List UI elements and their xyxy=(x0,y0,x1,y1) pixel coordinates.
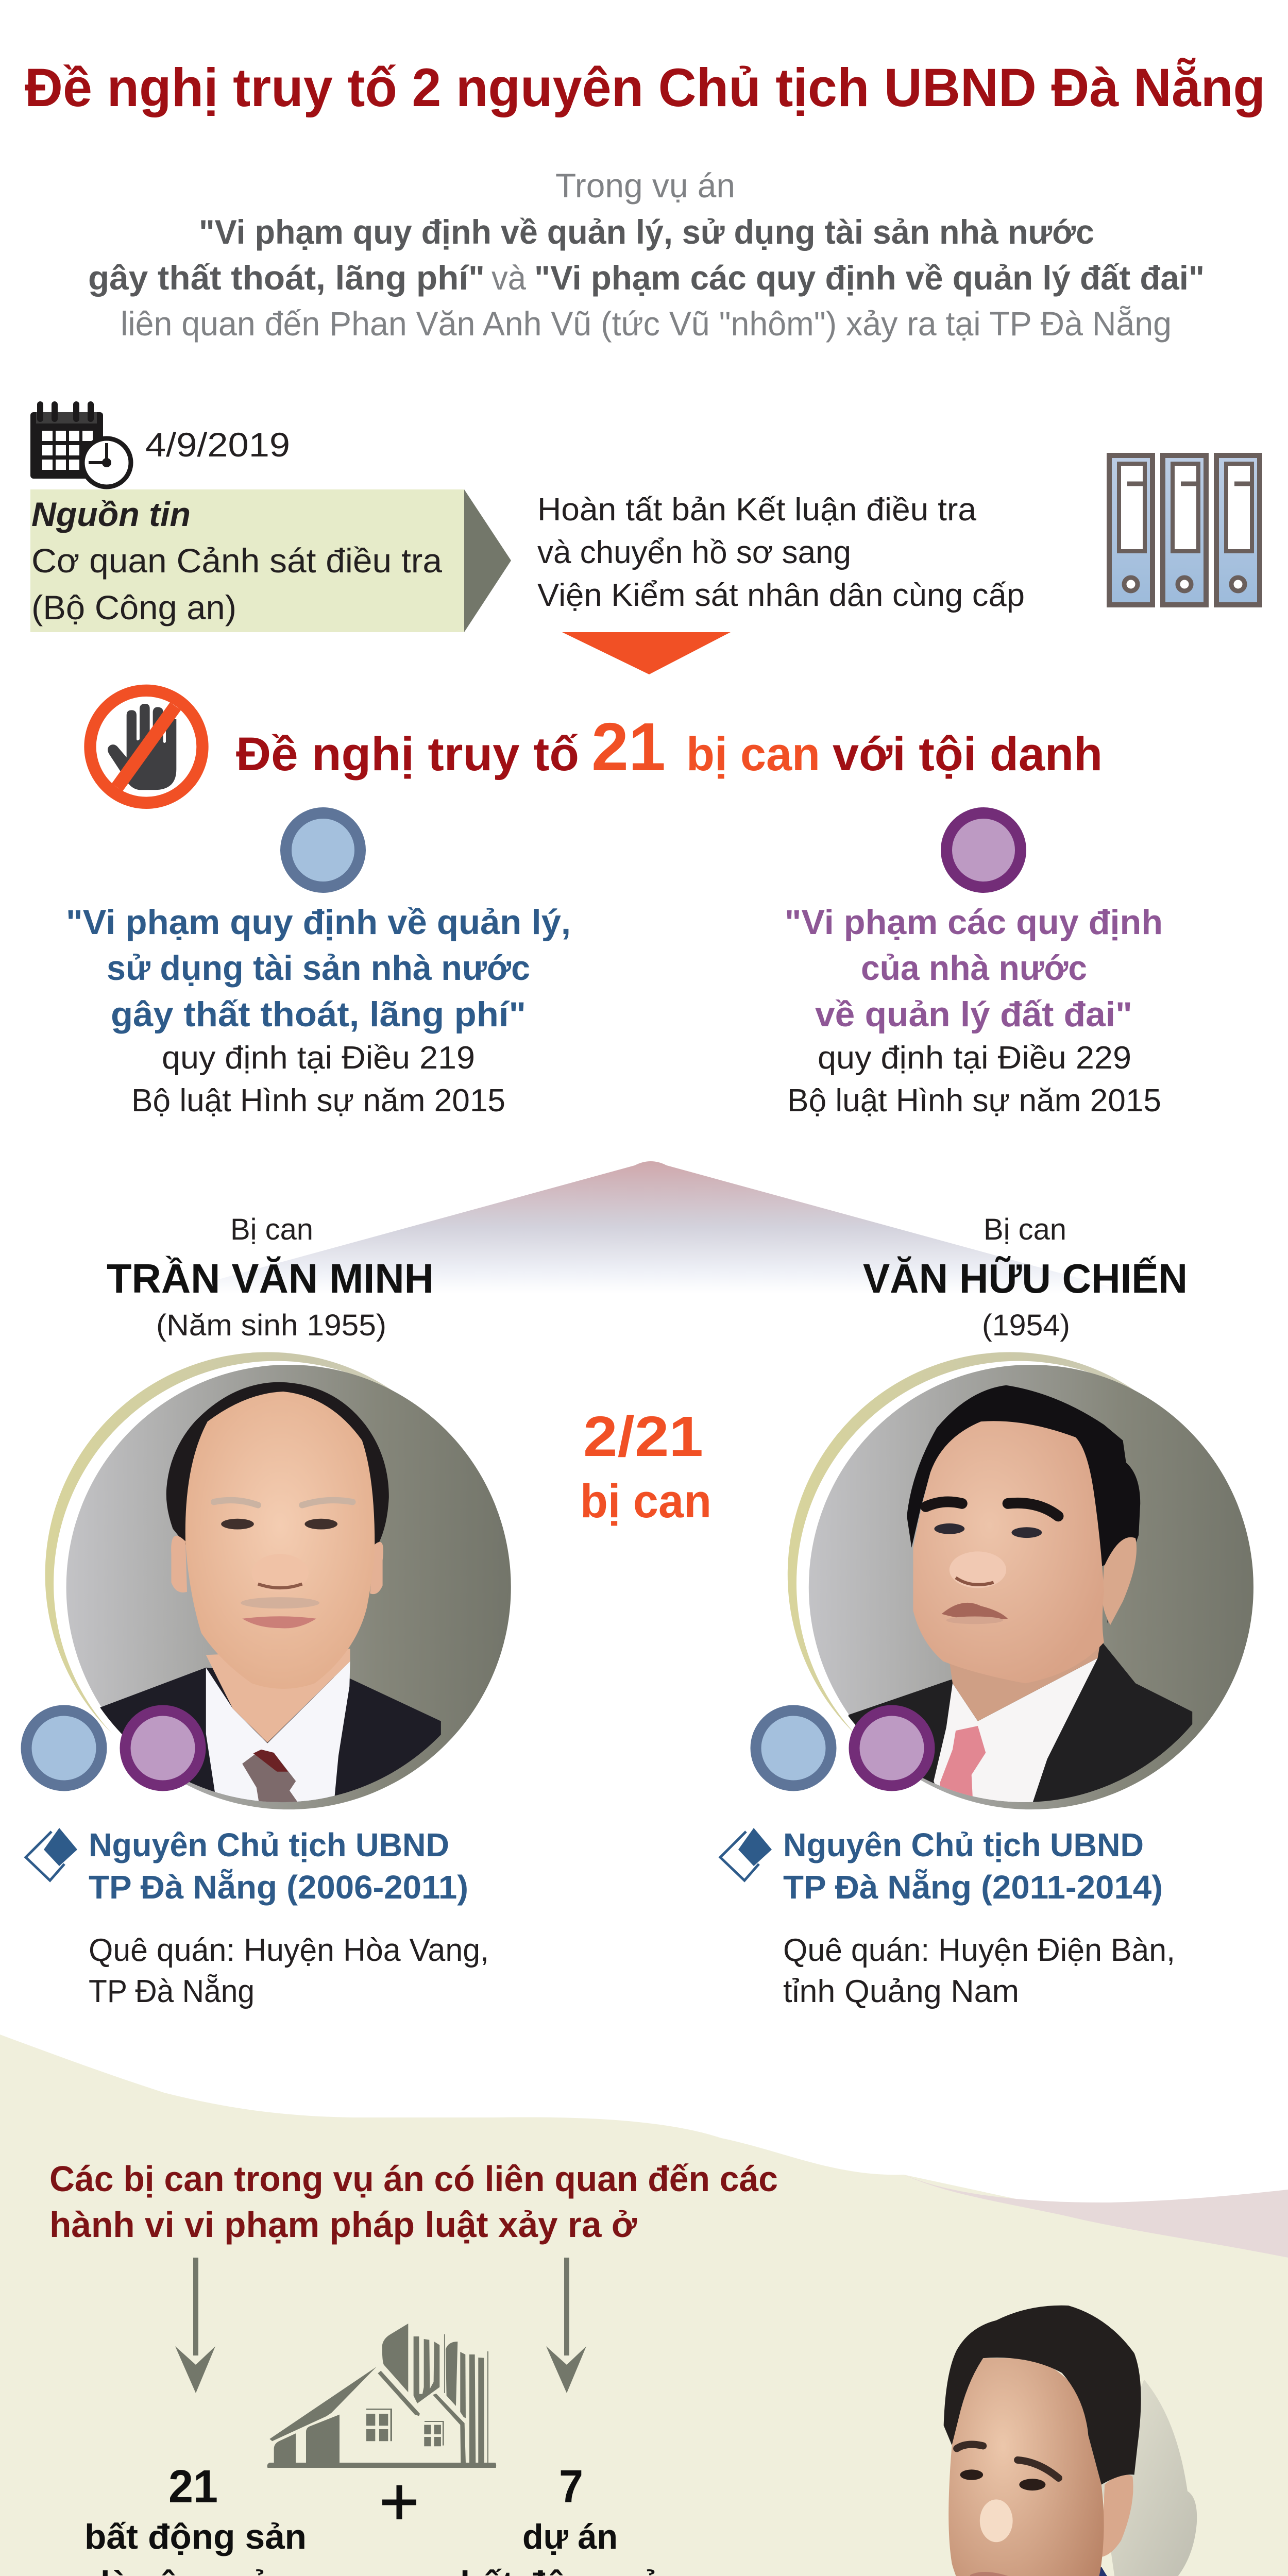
heading: proposal to prosecute 21 xyxy=(236,709,1103,785)
intro text block: Trong vụ án xyxy=(555,166,735,205)
heading: proposal to prosecute 21: 21 xyxy=(591,709,666,785)
arrow: left down xyxy=(175,2258,215,2393)
stat: 7 real estate projects: dự án xyxy=(522,2517,618,2556)
icon: stop hand xyxy=(90,690,202,803)
icon: calendar and clock xyxy=(30,401,131,487)
title: Đề nghị truy tố 2 nguyên Chủ tịch UBND Đà Nẵng xyxy=(25,57,1265,118)
arrow: orange down xyxy=(562,632,731,674)
heading: proposal to prosecute 21: bị can xyxy=(686,728,820,781)
connector fade xyxy=(168,1161,1133,1293)
accused 2 heading: Bị can xyxy=(984,1213,1066,1246)
accused 1 heading: TRẦN VĂN MINH xyxy=(107,1256,434,1301)
accused 1 heading: Bị can xyxy=(230,1213,313,1246)
panel: charge 1 xyxy=(66,813,571,1118)
accused 2 heading xyxy=(863,1213,1188,1342)
portrait: Trần Văn Minh xyxy=(45,1352,511,1844)
accused 2 heading: (1954) xyxy=(982,1309,1070,1342)
panel: charge 2: Bộ luật Hình sự năm 2015 xyxy=(787,1083,1161,1118)
panel: source: Nguồn tin xyxy=(31,495,191,533)
icon: binders xyxy=(1109,455,1260,605)
panel: charge 1: sử dụng tài sản nhà nước xyxy=(107,948,530,988)
arrow: right down xyxy=(546,2258,586,2393)
stat: 21 public properties xyxy=(41,2461,349,2576)
intro text block: và xyxy=(492,259,526,297)
stat: 7 real estate projects: 7 xyxy=(559,2461,583,2513)
icon: house and buildings xyxy=(267,2324,496,2468)
panel: charge 1: "Vi phạm quy định về quản lý, xyxy=(66,903,571,942)
stat: 7 real estate projects xyxy=(399,2461,743,2576)
bio: Văn Hữu Chiến: Quê quán: Huyện Điện Bàn, xyxy=(783,1933,1175,1968)
intro text block: "Vi phạm các quy định về quản lý đất đai" xyxy=(534,259,1205,297)
heading: proposal to prosecute 21: với tội danh xyxy=(833,728,1103,781)
intro text block: "Vi phạm quy định về quản lý, sử dụng tài sản nhà nước xyxy=(199,213,1094,251)
text: conclusion completed: Hoàn tất bản Kết luận điều tra xyxy=(537,492,977,528)
label: 2/21 accused: bị can xyxy=(580,1475,711,1528)
accused 1 heading: (Năm sinh 1955) xyxy=(156,1309,386,1342)
date: 4/9/2019 xyxy=(145,426,290,464)
text: conclusion completed xyxy=(537,492,1025,613)
panel: source: Cơ quan Cảnh sát điều tra xyxy=(31,541,442,580)
intro text block: gây thất thoát, lãng phí" xyxy=(88,259,485,297)
panel: charge 2 xyxy=(785,813,1163,1118)
intro text block: liên quan đến Phan Văn Anh Vũ (tức Vũ "nhôm") xảy ra tại TP Đà Nẵng xyxy=(121,304,1172,343)
bio: Trần Văn Minh: TP Đà Nẵng (2006-2011) xyxy=(89,1869,468,1906)
panel: charge 2: quy định tại Điều 229 xyxy=(818,1040,1131,1076)
plus sign xyxy=(382,2485,416,2519)
bio: Văn Hữu Chiến: TP Đà Nẵng (2011-2014) xyxy=(783,1869,1163,1906)
panel: charge 2: về quản lý đất đai" xyxy=(815,995,1132,1034)
panel: charge 2: "Vi phạm các quy định xyxy=(785,903,1163,942)
cream background panel xyxy=(0,2035,1288,2576)
bio: Văn Hữu Chiến: Nguyên Chủ tịch UBND xyxy=(783,1826,1144,1863)
bio: Trần Văn Minh: Quê quán: Huyện Hòa Vang, xyxy=(89,1933,489,1968)
text: conclusion completed: Viện Kiểm sát nhân dân cùng cấp xyxy=(537,578,1025,613)
accused 1 heading xyxy=(107,1213,434,1342)
label: 2/21 accused xyxy=(580,1405,711,1528)
bio: Trần Văn Minh xyxy=(26,1826,489,2009)
heading: violations: hành vi vi phạm pháp luật xảy ra ở xyxy=(49,2205,637,2245)
panel: charge 1: gây thất thoát, lãng phí" xyxy=(111,995,526,1034)
heading: proposal to prosecute 21: Đề nghị truy tố xyxy=(236,728,579,781)
heading: violations xyxy=(49,2159,778,2245)
portrait: Phan Văn Anh Vũ xyxy=(774,2306,1276,2576)
panel: charge 1: quy định tại Điều 219 xyxy=(162,1040,475,1076)
text: conclusion completed: và chuyển hồ sơ sang xyxy=(537,535,851,570)
bio: Trần Văn Minh: TP Đà Nẵng xyxy=(89,1974,255,2009)
portrait: Văn Hữu Chiến xyxy=(788,1352,1253,1844)
badges: left accused xyxy=(26,1710,200,1786)
panel: source: (Bộ Công an) xyxy=(31,588,236,626)
intro text block xyxy=(88,166,1205,343)
heading: violations: Các bị can trong vụ án có liên quan đến các xyxy=(49,2159,778,2199)
label: 2/21 accused: 2/21 xyxy=(583,1405,703,1468)
panel: charge 2: của nhà nước xyxy=(861,948,1087,988)
stat: 21 public properties: 21 xyxy=(168,2461,218,2513)
bio: Trần Văn Minh: Nguyên Chủ tịch UBND xyxy=(89,1826,449,1863)
stat: 21 public properties: bất động sản xyxy=(84,2517,307,2556)
panel: source xyxy=(30,489,511,632)
bio: Văn Hữu Chiến: tỉnh Quảng Nam xyxy=(783,1974,1019,2009)
bio: Văn Hữu Chiến xyxy=(720,1826,1175,2009)
panel: charge 1: Bộ luật Hình sự năm 2015 xyxy=(131,1083,505,1118)
accused 2 heading: VĂN HỮU CHIẾN xyxy=(863,1256,1188,1301)
badges: right accused xyxy=(756,1710,929,1786)
